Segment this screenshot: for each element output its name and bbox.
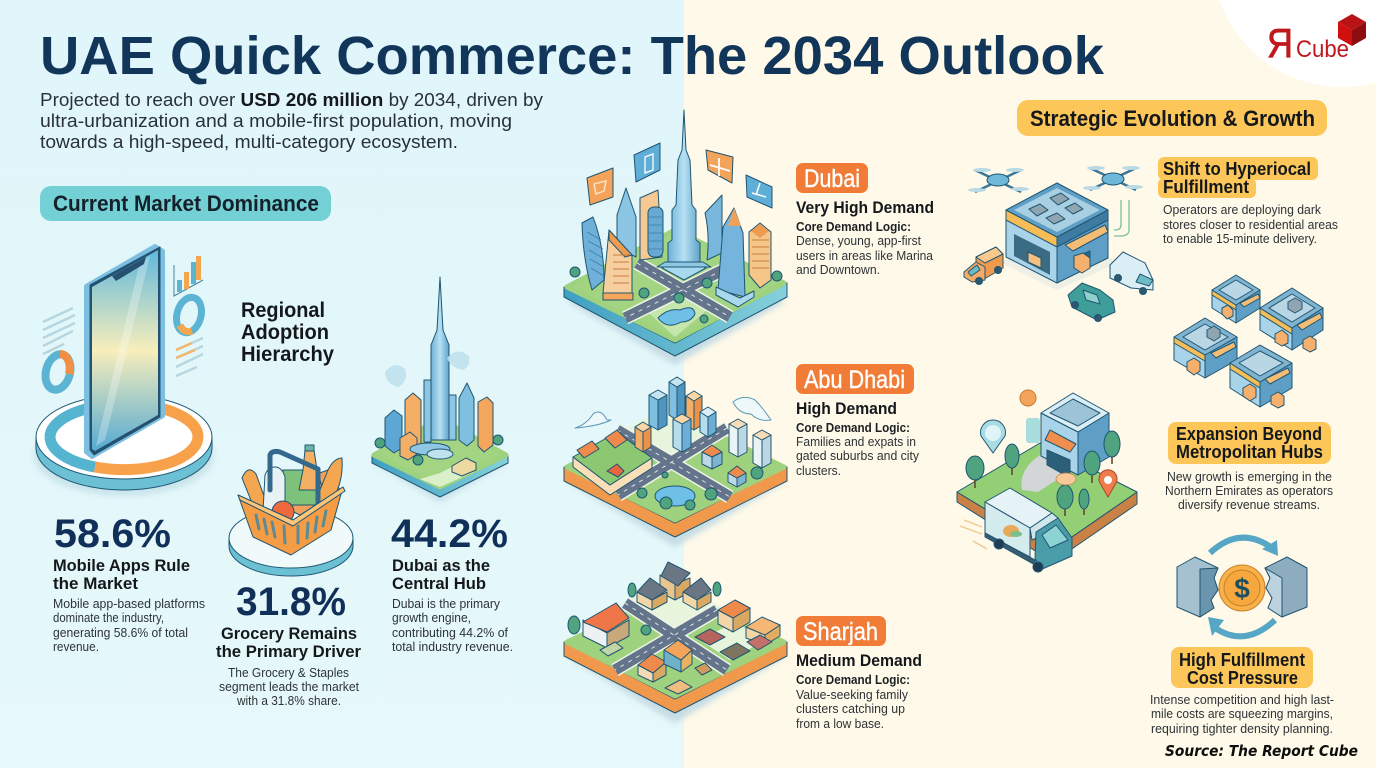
callout: Shift to Hyperlocal: Shift to Hyperiocal xyxy=(1163,159,1311,179)
stat: Dubai hub: Central Hub xyxy=(392,574,486,593)
callout: Sharjah demand: Core Demand Logic: xyxy=(796,673,910,687)
callout: Abu Dhabi demand: Core Demand Logic: xyxy=(796,421,910,435)
stat: Grocery: segment leads the market xyxy=(219,680,360,694)
store 1 xyxy=(1212,275,1260,323)
callout: High Fulfillment Cost Pressure: mile costs are squeezing margins, xyxy=(1151,707,1333,721)
green pickup xyxy=(1068,283,1115,322)
top arrow xyxy=(1210,538,1278,556)
bottom arrow xyxy=(1208,617,1275,636)
callout: Dubai demand: users in areas like Marina xyxy=(796,249,933,263)
callout: Expansion Beyond Metropolitan Hubs: Expansion Beyond xyxy=(1176,424,1322,444)
stat: Dubai hub: Dubai is the primary xyxy=(392,597,501,611)
callout: Sharjah demand: clusters catching up xyxy=(796,702,905,716)
intro text block xyxy=(40,90,543,152)
source note: Source: The Report Cube xyxy=(1165,742,1358,760)
floating app icons xyxy=(587,143,772,208)
logo: RCube: Я xyxy=(1267,20,1293,66)
callout: Abu Dhabi demand: Abu Dhabi xyxy=(804,366,905,394)
illustration: Sharjah neighbourhood plate xyxy=(564,562,787,723)
stat: Grocery: with a 31.8% share. xyxy=(236,694,341,708)
intro text block: towards a high-speed, multi-category ecosystem. xyxy=(40,132,458,152)
logo: RCube: Cube xyxy=(1296,36,1349,63)
stat: Mobile Apps: 58.6% xyxy=(54,512,171,556)
pond and trees xyxy=(637,467,763,510)
heading: Regional Adoption Hierarchy: Adoption xyxy=(241,321,329,344)
illustration: cost pressure coin and blocks xyxy=(1177,538,1307,636)
callout: High Fulfillment Cost Pressure: High Fulfillment xyxy=(1179,650,1305,670)
market stalls and trees xyxy=(568,582,772,694)
callout: High Fulfillment Cost Pressure: Cost Pressure xyxy=(1187,668,1298,688)
logo: RCube xyxy=(1212,0,1376,87)
stat: Grocery: 31.8% xyxy=(236,580,346,624)
callout: Abu Dhabi demand: gated suburbs and city xyxy=(796,449,920,463)
heading: Regional Adoption Hierarchy: Regional xyxy=(241,299,325,322)
stat: Dubai hub xyxy=(391,512,513,654)
stat: Mobile Apps: Mobile app-based platforms xyxy=(53,597,205,611)
illustration: Abu Dhabi city plate xyxy=(564,377,787,547)
clouds xyxy=(575,397,771,428)
delivery truck xyxy=(985,488,1072,572)
store 2 xyxy=(1260,288,1323,352)
callout: Abu Dhabi demand: Families and expats in xyxy=(796,435,916,449)
background: left panel xyxy=(0,0,684,768)
callout: Sharjah demand: Medium Demand xyxy=(796,651,922,670)
stat: Dubai hub: contributing 44.2% of xyxy=(392,626,509,640)
callout: Shift to Hyperlocal xyxy=(1158,157,1338,246)
callout: Expansion Beyond Metropolitan Hubs: Metropolitan Hubs xyxy=(1176,442,1323,462)
stat: Mobile Apps: revenue. xyxy=(53,640,99,654)
stat: Dubai hub: 44.2% xyxy=(391,512,508,556)
illustration: grocery basket xyxy=(229,445,353,576)
callout: Sharjah demand: from a low base. xyxy=(796,717,884,731)
stat: Grocery: The Grocery & Staples xyxy=(228,666,349,680)
illustration: store on green plot with delivery truck xyxy=(957,390,1137,572)
title: UAE Quick Commerce: The 2034 Outlook xyxy=(40,26,1105,86)
walled compound xyxy=(573,430,652,495)
callout: Abu Dhabi demand xyxy=(796,364,920,478)
stat: Dubai hub: Dubai as the xyxy=(392,556,490,575)
callout: Dubai demand: Core Demand Logic: xyxy=(796,220,911,234)
illustration: dark store with drones and vehicles xyxy=(964,166,1153,322)
houses xyxy=(583,562,780,682)
stat: Dubai hub: growth engine, xyxy=(392,611,471,625)
callout: Sharjah demand: Sharjah xyxy=(803,618,878,646)
callout: Sharjah demand: Value-seeking family xyxy=(796,688,909,702)
callout: High Fulfillment Cost Pressure xyxy=(1150,647,1334,736)
donut charts xyxy=(42,295,205,392)
trees xyxy=(570,267,782,323)
stat: Mobile Apps: Mobile Apps Rule xyxy=(53,556,190,575)
background: right panel xyxy=(684,0,1376,768)
stat: Grocery: the Primary Driver xyxy=(216,642,361,661)
store 3 xyxy=(1174,318,1237,378)
illustration: distributed dark stores xyxy=(1174,275,1323,408)
towers xyxy=(635,377,771,487)
illustration: small Dubai skyline xyxy=(372,277,508,503)
store building xyxy=(1026,393,1109,478)
skyscrapers xyxy=(582,110,771,307)
heading: Strategic Evolution & Growth: Strategic Evolution & Growth xyxy=(1030,106,1315,131)
heading: Regional Adoption Hierarchy: Hierarchy xyxy=(241,343,334,366)
stat: Mobile Apps: generating 58.6% of total xyxy=(53,626,188,640)
callout: Dubai demand: Dubai xyxy=(804,165,860,193)
trees xyxy=(966,431,1120,516)
stat: Grocery xyxy=(216,580,361,708)
drones xyxy=(968,166,1143,192)
stat: Grocery: Grocery Remains xyxy=(221,624,357,643)
stat: Mobile Apps xyxy=(53,512,205,654)
callout: Dubai demand: Dense, young, app-first xyxy=(796,234,921,248)
callout: Expansion Beyond Metropolitan Hubs: diversify revenue streams. xyxy=(1178,498,1320,512)
callout: Shift to Hyperlocal: Operators are deploying dark xyxy=(1163,203,1322,217)
white van xyxy=(1110,252,1153,294)
stat: Mobile Apps: the Market xyxy=(53,574,138,593)
intro text block: Projected to reach over USD 206 million by 2034, driven by xyxy=(40,90,543,110)
arrows xyxy=(1114,200,1129,236)
stat: Dubai hub: total industry revenue. xyxy=(392,640,513,654)
callout: Expansion Beyond Metropolitan Hubs xyxy=(1165,422,1333,512)
heading: Regional Adoption Hierarchy xyxy=(241,299,334,366)
callout: Sharjah demand xyxy=(796,616,922,731)
callout: Abu Dhabi demand: clusters. xyxy=(796,464,841,478)
map pins xyxy=(980,390,1117,497)
callout: Dubai demand: Very High Demand xyxy=(796,198,934,217)
decorative data lines xyxy=(43,308,203,376)
heading: Strategic Evolution & Growth xyxy=(1017,100,1327,136)
callout: Dubai demand: and Downtown. xyxy=(796,263,880,277)
callout: Abu Dhabi demand: High Demand xyxy=(796,399,897,418)
orange truck xyxy=(964,247,1003,284)
chart icon xyxy=(174,256,203,296)
callout: Expansion Beyond Metropolitan Hubs: Northern Emirates as operators xyxy=(1165,484,1333,498)
heading: Current Market Dominance: Current Market Dominance xyxy=(53,191,319,216)
stat: Mobile Apps: dominate the industry, xyxy=(53,611,164,625)
illustration: cost pressure coin and blocks: $ xyxy=(1234,573,1250,604)
callout: Shift to Hyperlocal: stores closer to residential areas xyxy=(1163,218,1338,232)
callout: High Fulfillment Cost Pressure: requiring tighter density planning. xyxy=(1151,722,1333,736)
callout: Dubai demand xyxy=(796,163,934,277)
store 4 xyxy=(1230,345,1292,408)
callout: High Fulfillment Cost Pressure: Intense competition and high last- xyxy=(1150,693,1334,707)
callout: Shift to Hyperlocal: Fulfillment xyxy=(1163,177,1249,197)
callout: Expansion Beyond Metropolitan Hubs: New growth is emerging in the xyxy=(1167,470,1332,484)
illustration: phone on platform xyxy=(34,246,214,496)
intro text block: ultra-urbanization and a mobile-first population, moving xyxy=(40,111,512,131)
heading: Current Market Dominance xyxy=(40,186,331,221)
illustration: Dubai city plate xyxy=(564,110,787,365)
callout: Shift to Hyperlocal: to enable 15-minute delivery. xyxy=(1163,232,1317,246)
